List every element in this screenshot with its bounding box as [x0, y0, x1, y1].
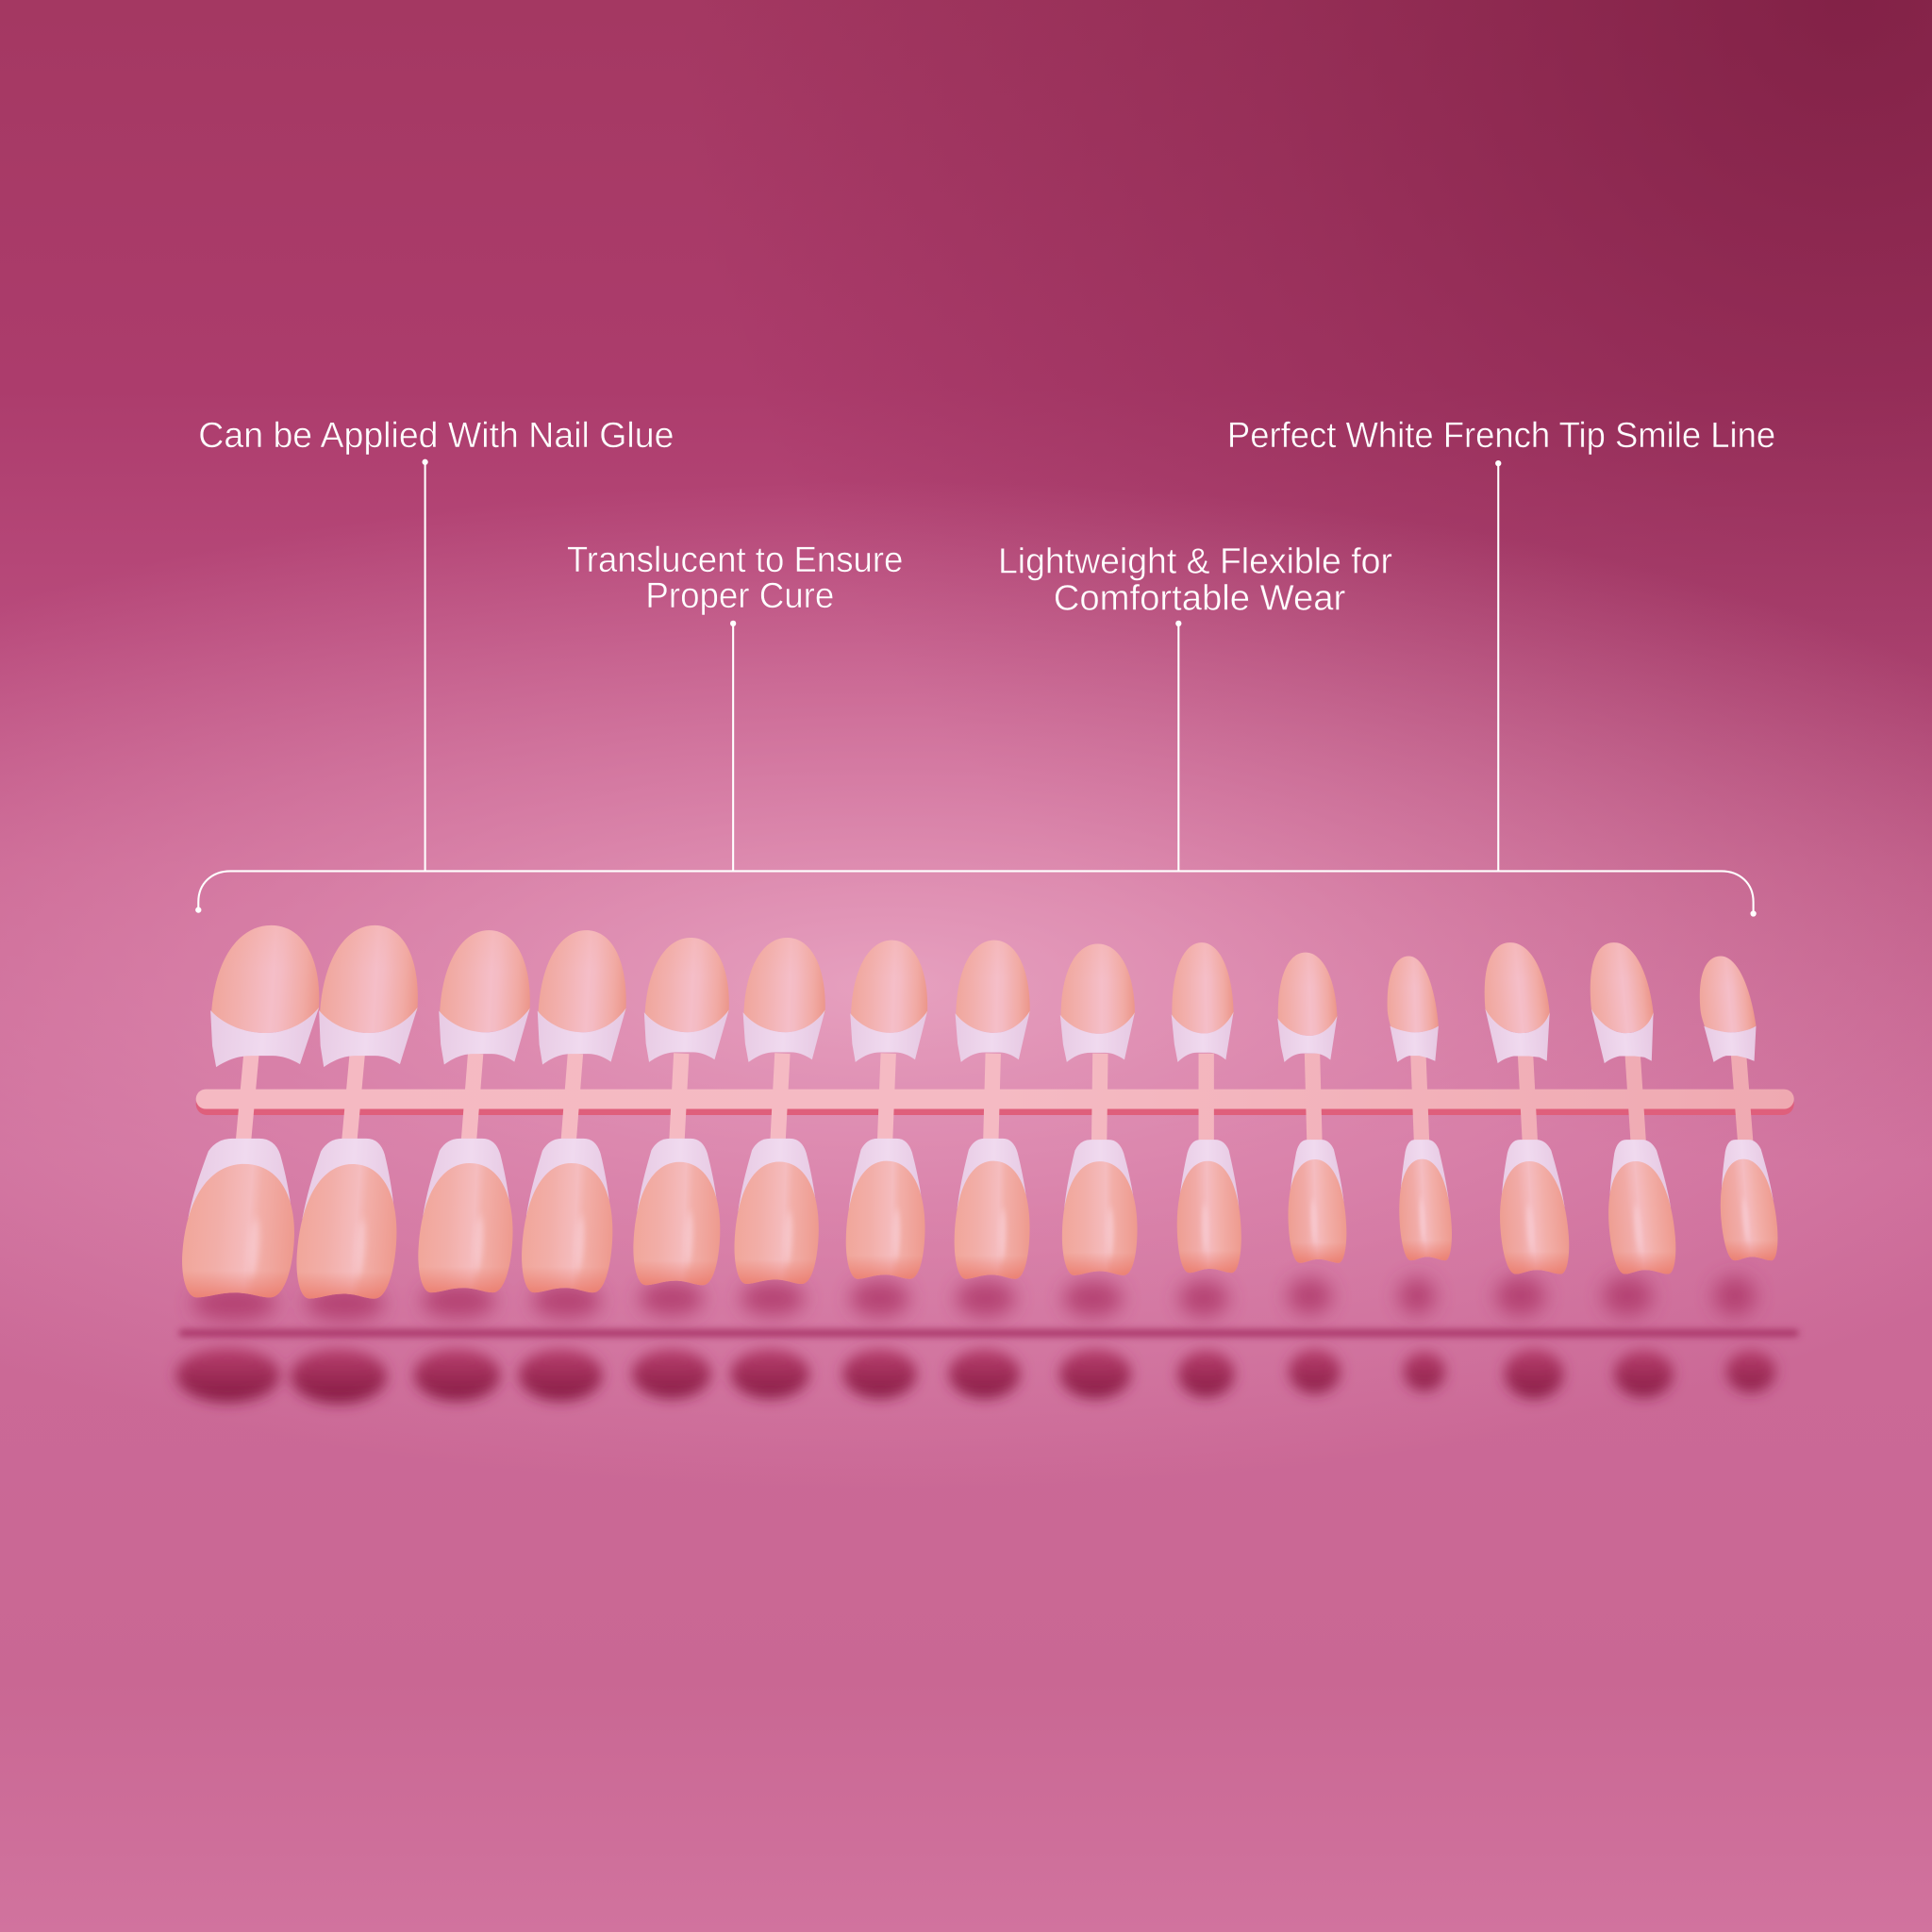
bracket — [195, 871, 1757, 917]
nail pair 13 — [1479, 942, 1572, 1274]
nail pair 3 — [416, 930, 534, 1292]
callout: french tip — [1227, 416, 1775, 871]
callout: french tip: Perfect White French Tip Smile Line — [1227, 416, 1775, 456]
callout: nail glue — [198, 416, 674, 871]
runner bar — [196, 1090, 1794, 1115]
nail pair 14 — [1584, 942, 1678, 1274]
nail pair 10 — [1170, 942, 1241, 1273]
nail pair 9 — [1060, 943, 1138, 1275]
floor shadows — [176, 1276, 1799, 1404]
nail pair 2 — [293, 925, 424, 1299]
callout: lightweight: Comfortable Wear — [1054, 579, 1345, 619]
nail tip set on runner bar — [179, 925, 1794, 1299]
nail pair 12 — [1386, 957, 1454, 1260]
nail pair 1 — [179, 925, 325, 1297]
nail pair 5 — [632, 938, 733, 1285]
nail pair 7 — [845, 941, 930, 1279]
nail pair 4 — [520, 930, 630, 1292]
callout: nail glue: Can be Applied With Nail Glue — [198, 416, 674, 456]
callout: translucent: Proper Cure — [645, 576, 834, 616]
callout: translucent: Translucent to Ensure — [567, 541, 903, 580]
nail pair 11 — [1275, 953, 1348, 1263]
callout: translucent — [567, 541, 903, 871]
callout: lightweight: Lightweight & Flexible for — [998, 541, 1392, 581]
nail pair 8 — [954, 941, 1031, 1279]
nail pair 6 — [733, 938, 827, 1284]
callout: lightweight — [998, 541, 1392, 871]
nail pair 15 — [1696, 957, 1780, 1260]
